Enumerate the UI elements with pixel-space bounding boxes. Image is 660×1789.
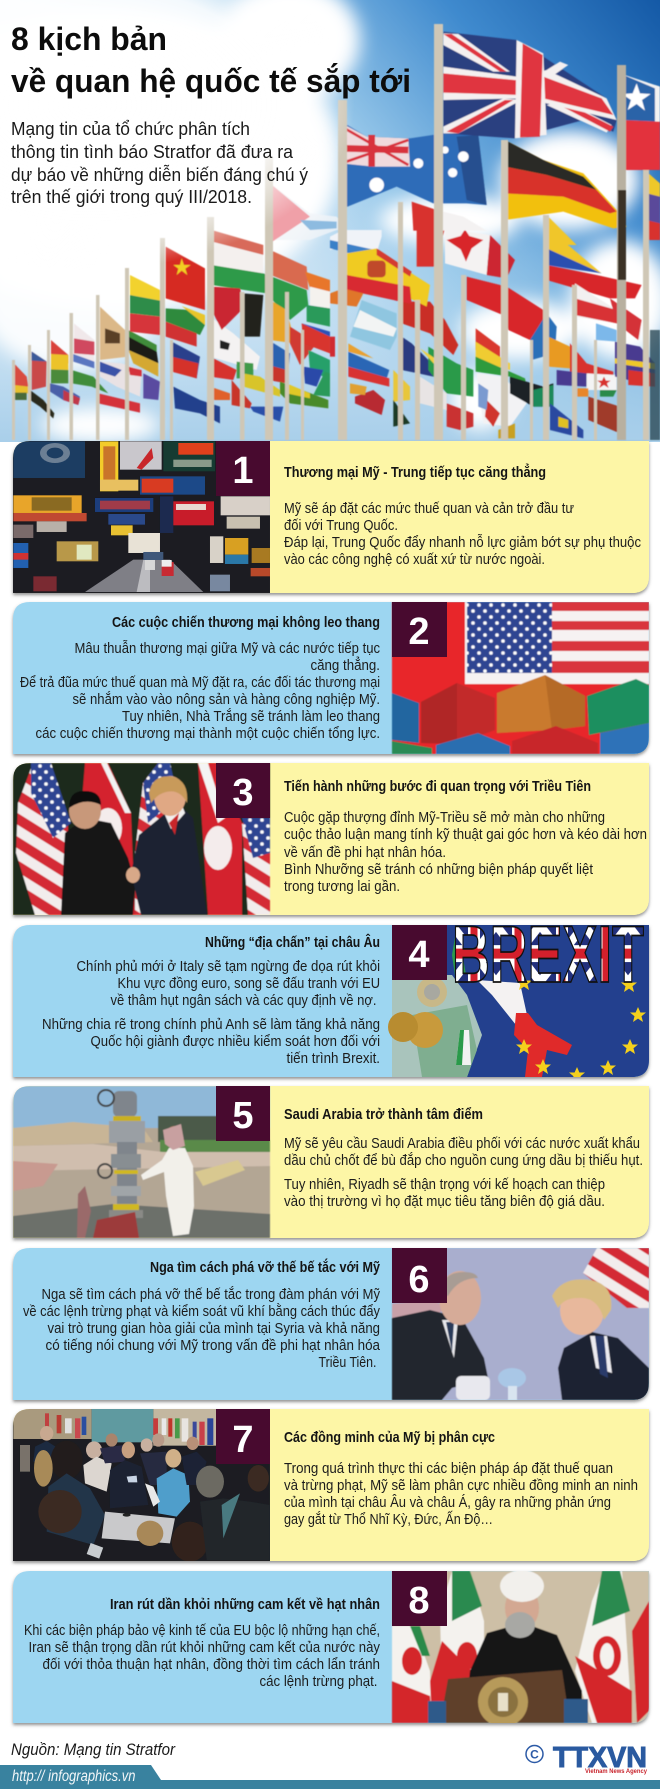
intro text [11,119,308,207]
panel 1 heading: Thương mại Mỹ - Trung tiếp tục căng thẳng [284,463,546,481]
number box [216,763,270,818]
panel 8 heading: Iran rút dần khỏi những cam kết về hạt nhân [110,1596,380,1613]
panel 3 text: trong tương lai gần. [284,879,400,895]
panel 7 text: gay gắt từ Thổ Nhĩ Kỳ, Đức, Ấn Độ… [284,1511,493,1528]
intro text: thông tin tình báo Stratfor đã đưa ra [11,142,294,162]
panel 2 text: Để trả đũa mức thuế quan mà Mỹ đặt ra, các đối tác thương mại [20,675,380,691]
panel 4 text: Chính phủ mới ở Italy sẽ tạm ngừng đe dọa rút khỏi [76,959,380,975]
panel 8 text: Khi các biện pháp bảo vệ kinh tế của EU bộc lộ những hạn chế, [24,1623,380,1639]
panel 3: North Korea [13,763,649,915]
hero photo: flags against the sky [0,0,660,443]
panel 8 text: Iran sẽ thận trọng dần rút khỏi những cam kết của nước này [28,1640,381,1656]
flag poles [12,24,649,440]
panel 2: trade wars: 2 [408,611,430,653]
panel 4 text: Khu vực đồng euro, song sẽ đấu tranh với EU [118,976,380,992]
photo: Hong Kong street [13,441,270,593]
panel 3 text: Bình Nhưỡng sẽ tránh có những biện pháp quyết liệt [284,862,593,878]
panel 7 heading: Các đồng minh của Mỹ bị phân cực [284,1429,495,1446]
title: 8 kịch bản [11,21,167,57]
panel 4 text: về thâm hụt ngân sách và các quy định về nợ. [110,993,376,1009]
panel 5: Saudi Arabia: 5 [232,1095,254,1137]
panel 4: Europe: 4 [408,934,430,976]
TTXVN logo: C [530,1748,539,1762]
panel 1 text: Mỹ sẽ áp đặt các mức thuế quan và cản trở đầu tư [284,501,574,517]
panel 1: US-China trade [13,441,649,593]
number box [216,441,270,496]
photo: Putin and Trump talking [392,1248,649,1400]
white haze over the left of the hero [0,0,420,300]
panel 2 text [20,640,380,742]
panel 6 text: Nga sẽ tìm cách phá vỡ thế bế tắc trong đàm phán với Mỹ [42,1286,381,1303]
panel 6 heading: Nga tìm cách phá vỡ thế bế tắc với Mỹ [150,1258,381,1276]
panel 2 text: Tuy nhiên, Nhà Trắng sẽ tránh làm leo thang [122,708,380,725]
panel 7 text [284,1461,638,1528]
panel 3 text: về vấn đề phi hạt nhân hóa. [284,845,446,861]
number box [392,925,447,980]
panel 2 text: sẽ nhắm vào vào nông sản và hàng công nghiệp Mỹ. [72,691,380,708]
intro text: trên thế giới trong quý III/2018. [11,187,252,207]
panel 2 text: Mâu thuẫn thương mại giữa Mỹ và các nước tiếp tục [74,640,380,657]
panel 4 text [42,959,380,1067]
TTXVN logo: TTXVN [553,1742,647,1774]
photo: oil wellhead and Saudi official [13,1086,270,1238]
panel 7: US allies: 7 [232,1419,254,1461]
panel 7: US allies [13,1409,649,1562]
panel 3 heading: Tiến hành những bước đi quan trọng với Triều Tiên [284,778,591,795]
panel 2 text: căng thẳng. [310,656,380,674]
photo: Rouhani at a podium [392,1570,649,1727]
panel 8 text: các lệnh trừng phạt. [260,1674,378,1690]
number box [392,1248,447,1303]
panel 8: Iran: 8 [408,1580,430,1622]
panel 5 text: vào thị trường vì họ đặt mục tiêu tăng biên độ giá dầu. [284,1194,605,1210]
panel 4 text: Quốc hội giành được nhiều kiểm soát hơn đối với [90,1034,380,1050]
panel 5: Saudi Arabia [13,1086,649,1238]
panel 1 text [284,501,641,568]
flags: right group [330,228,660,440]
photo: containers and US flag [392,602,649,754]
number box [392,1571,447,1626]
footer bar with website: http:// infographics.vn [12,1768,136,1785]
panel 5 text: Tuy nhiên, Riyadh sẽ thận trọng với kế hoạch can thiệp [284,1177,605,1193]
panel 2: trade wars [13,602,649,754]
panel 5 heading: Saudi Arabia trở thành tâm điểm [284,1106,483,1123]
number box [216,1409,270,1464]
panel 2 heading: Các cuộc chiến thương mại không leo thang [112,614,380,631]
number box [392,602,447,657]
photo: Brexit and Italy map [388,925,649,1077]
panel 4: Europe [13,909,649,1082]
panel 6 text [23,1286,381,1371]
footer bar with website [0,1765,660,1789]
panel 4 heading: Những “địa chấn” tại châu Âu [205,933,380,951]
panel 3 text [284,810,647,895]
panel 6: Russia: 6 [408,1259,430,1301]
flags: left group [14,230,330,423]
intro text: dự báo về những diễn biến đáng chú ý [11,164,308,185]
panel 3 text: Cuộc gặp thượng đỉnh Mỹ-Triều sẽ mở màn cho những [284,810,605,826]
photo: Brexit and Italy map: BREXIT [452,909,644,999]
title [11,21,411,99]
number box [216,1086,270,1141]
flags: upper group [270,32,660,245]
panel 6: Russia [13,1248,649,1400]
panel 4 text: Những chia rẽ trong chính phủ Anh sẽ làm tăng khả năng [42,1017,380,1033]
panel 4 text: tiến trình Brexit. [286,1051,380,1067]
panel 1 text: vào các công nghệ có xuất xứ từ nước ngoài. [284,552,545,568]
title: về quan hệ quốc tế sắp tới [11,63,411,99]
photo: Kim and Trump handshake [13,763,270,915]
panel 6 text: vai trò trung gian hòa giải của mình tại Syria và khả năng [48,1321,380,1337]
panel 8: Iran [13,1570,649,1727]
panel 6 text: có tiếng nói chung với Mỹ trong vấn đề phi hạt nhân hóa [46,1338,381,1354]
panel 1 text: đối với Trung Quốc. [284,518,398,534]
source line: Nguồn: Mạng tin Stratfor [11,1741,176,1759]
panel 8 text: đối với thỏa thuận hạt nhân, đồng thời tìm cách lẩn tránh [42,1657,380,1673]
panel 8 text [24,1623,381,1690]
panel 6 text: về các lệnh trừng phạt và kiểm soát vũ khí bằng cách thúc đẩy [23,1303,381,1320]
panel 6 text: Triều Tiên. [318,1355,376,1371]
panel 1: US-China trade: 1 [232,450,254,492]
panel 5 text [284,1136,643,1210]
panel 7 text: của mình tại châu Âu và châu Á, gây ra những phản ứng [284,1494,611,1511]
panel 7 text: Trong quá trình thực thi các biện pháp áp đặt thuế quan [284,1461,613,1477]
photo: G7 leaders around a table [13,1409,270,1562]
panel 3: North Korea: 3 [232,772,254,814]
TTXVN logo: Vietnam News Agency [585,1768,647,1775]
intro text: Mạng tin của tổ chức phân tích [11,119,250,139]
panel 2 text: các cuộc chiến thương mại thành một cuộc chiến tổng lực. [36,726,380,742]
